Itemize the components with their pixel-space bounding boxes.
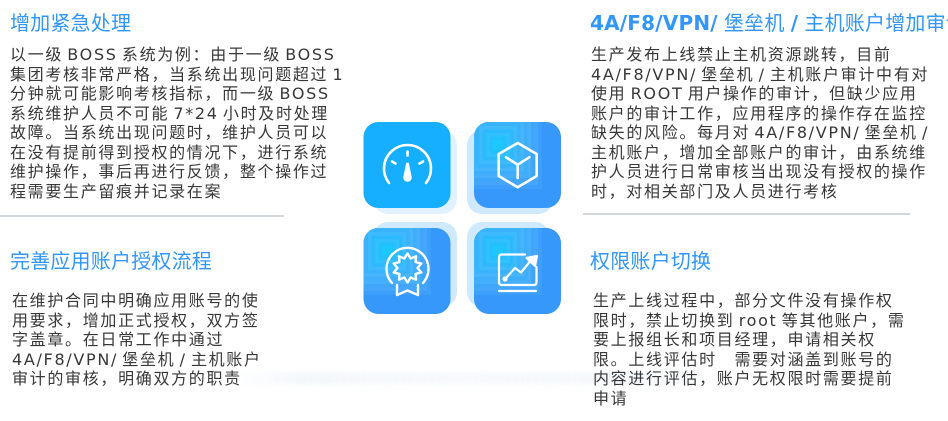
text: application account authorization: 字盖章。在日常工作中通过 bbox=[12, 330, 224, 349]
background band bbox=[230, 372, 710, 385]
tile 3: award badge bbox=[364, 222, 457, 314]
heading: privileged account switching: 权限账户切换 bbox=[590, 249, 711, 273]
text: application account authorization bbox=[12, 291, 262, 388]
text: privileged account switching: 申请 bbox=[593, 388, 628, 408]
text: privileged account switching: 生产上线过程中，部分文件没有操作权 bbox=[593, 291, 894, 310]
text: host account audit: 缺失的风险。每月对 4A/F8/VPN/ 堡垒机 / bbox=[591, 123, 929, 142]
text: host account audit: 护人员进行日常审核当出现没有授权的操作 bbox=[591, 162, 927, 181]
icon: award badge bbox=[386, 248, 428, 295]
text: privileged account switching: 要上报组长和项目经理，申请相关权 bbox=[593, 330, 876, 349]
text: host account audit: 生产发布上线禁止主机资源跳转，目前 bbox=[591, 45, 892, 64]
tile 2: cube bbox=[467, 122, 561, 214]
text: urgent handling bbox=[10, 45, 344, 200]
text: host account audit: 主机账户，增加全部账户的审计，由系统维 bbox=[591, 142, 927, 162]
text: privileged account switching: 限。上线评估时 需要对涵盖到账号的 bbox=[593, 350, 894, 368]
heading: application account authorization: 完善应用账户授权流程 bbox=[10, 249, 212, 273]
text: host account audit: 账户的审计工作，应用程序的操作存在监控 bbox=[591, 104, 927, 122]
text: urgent handling: 维护操作，事后再进行反馈，整个操作过 bbox=[10, 162, 328, 181]
central icon grid bbox=[364, 122, 561, 314]
heading: urgent handling: 增加紧急处理 bbox=[10, 11, 131, 35]
text: privileged account switching: 内容进行评估，账户无权限时需要提前 bbox=[593, 369, 894, 388]
text: privileged account switching: 限时，禁止切换到 root 等其他账户，需 bbox=[593, 310, 906, 330]
icon: cube bbox=[499, 143, 537, 187]
text: urgent handling: 系统维护人员不可能 7*24 小时及时处理 bbox=[10, 104, 329, 122]
icon: gauge bbox=[384, 145, 431, 183]
text: host account audit: 时，对相关部门及人员进行考核 bbox=[591, 182, 839, 200]
text: host account audit: 4A/F8/VPN/ 堡垒机 / 主机账户审计中有对 bbox=[591, 64, 929, 84]
text: privileged account switching bbox=[593, 291, 906, 408]
text: application account authorization: 4A/F8/VPN/ 堡垒机 / 主机账户 bbox=[12, 350, 262, 368]
text: application account authorization: 审计的审核，明确双方的职责 bbox=[12, 369, 242, 388]
text: urgent handling: 程需要生产留痕并记录在案 bbox=[10, 182, 222, 200]
text: application account authorization: 在维护合同中明确应用账号的使 bbox=[12, 291, 260, 310]
tile 1: gauge bbox=[364, 122, 457, 214]
text: host account audit bbox=[591, 45, 929, 200]
text: urgent handling: 集团考核非常严格，当系统出现问题超过 1 bbox=[10, 64, 344, 84]
icon: growth chart bbox=[499, 254, 537, 291]
text: host account audit: 使用 ROOT 用户操作的审计，但缺少应用 bbox=[591, 84, 918, 103]
text: urgent handling: 分钟就可能影响考核指标，而一级 BOSS bbox=[10, 84, 330, 103]
text: urgent handling: 故障。当系统出现问题时，维护人员可以 bbox=[10, 123, 328, 142]
text: application account authorization: 用要求，增加正式授权，双方签 bbox=[12, 310, 260, 330]
text: urgent handling: 以一级 BOSS 系统为例：由于一级 BOSS bbox=[10, 45, 336, 64]
tile 4: growth chart bbox=[467, 222, 561, 314]
text: urgent handling: 在没有提前得到授权的情况下，进行系统 bbox=[10, 142, 328, 162]
